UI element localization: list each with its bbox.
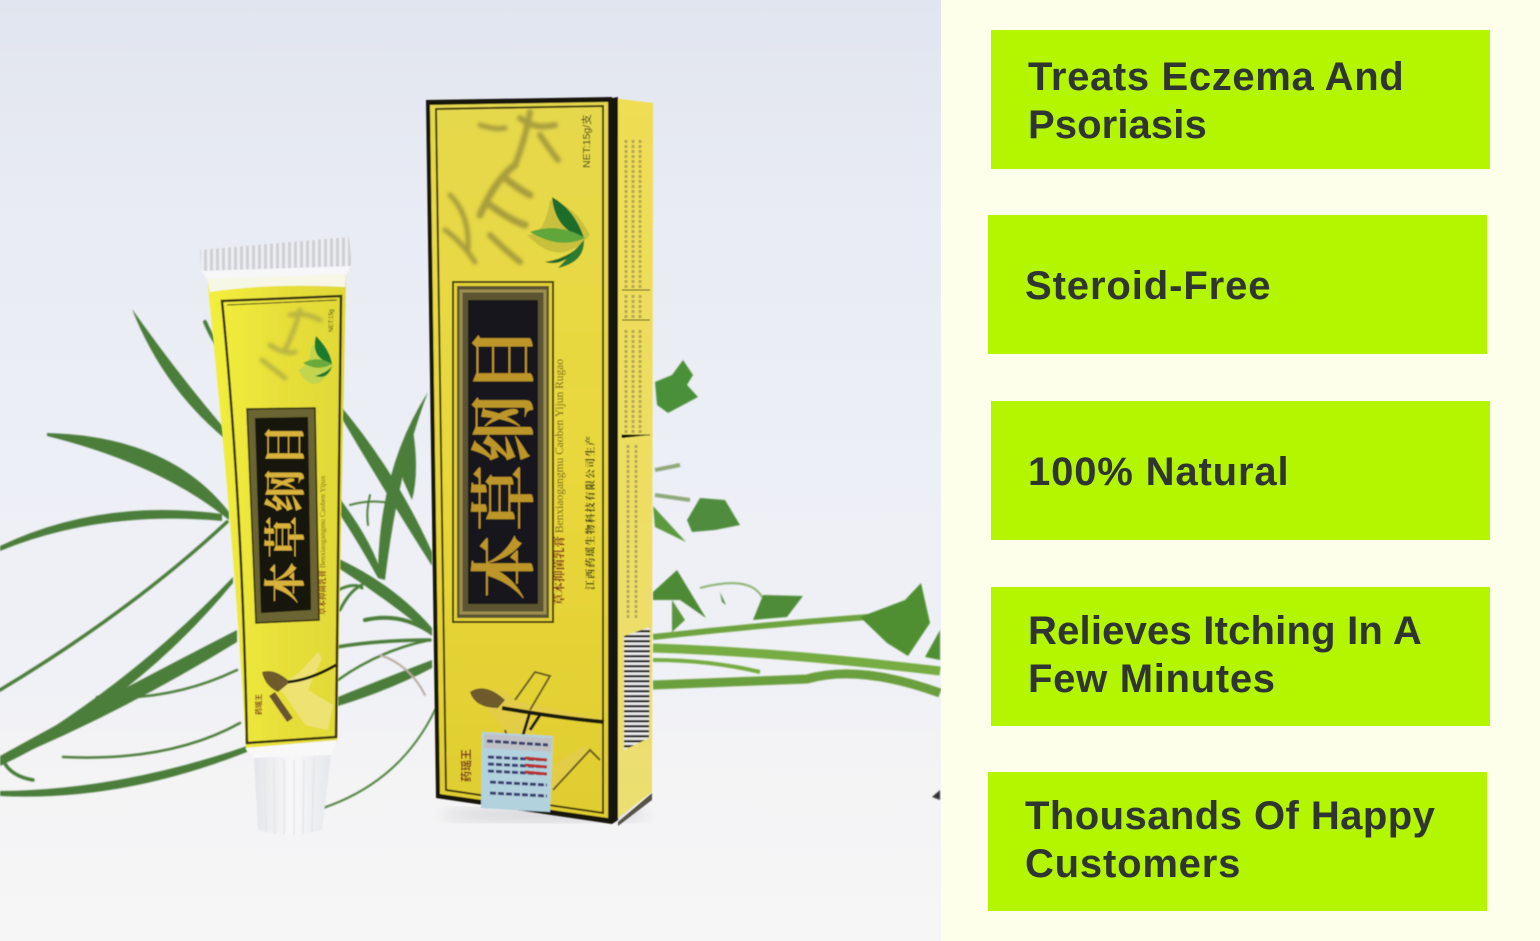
benefit card: relieves itching: Few Minutes bbox=[1028, 657, 1276, 701]
tube figure illustration bbox=[262, 652, 336, 730]
figure illustration bbox=[470, 672, 604, 790]
benefit card: treats eczema and psoriasis bbox=[991, 30, 1490, 169]
tube crimped end bbox=[245, 740, 337, 835]
net weight label: NET:15g/支 bbox=[581, 114, 593, 168]
tube ribbed cap bbox=[200, 237, 352, 292]
product box bbox=[426, 97, 653, 826]
benefit card: relieves itching: Relieves Itching In A bbox=[1028, 609, 1422, 653]
benefit card: treats eczema and psoriasis: Treats Eczema And bbox=[1028, 55, 1404, 99]
benefit card: relieves itching bbox=[991, 587, 1490, 726]
benefit card: steroid-free bbox=[988, 215, 1487, 354]
barcode bbox=[624, 627, 650, 750]
benefit card: 100% natural: 100% Natural bbox=[1028, 450, 1289, 494]
product photo panel bbox=[0, 0, 941, 941]
tube frame lines bbox=[222, 296, 341, 743]
security sticker bbox=[481, 732, 553, 812]
brand name plate: 本草纲目 bbox=[451, 324, 546, 600]
box shadow bbox=[440, 808, 650, 822]
tube seal text: 药瑶王 bbox=[254, 694, 264, 715]
tube body bbox=[207, 272, 346, 750]
box side face bbox=[612, 97, 653, 826]
tube brand plate: 本草纲目 bbox=[253, 420, 313, 604]
tea leaf emblem bbox=[527, 197, 590, 268]
tube weight label: NET:15g bbox=[329, 309, 335, 332]
benefit card: happy customers bbox=[988, 772, 1487, 911]
ointment tube bbox=[200, 237, 352, 835]
benefit card: happy customers: Thousands Of Happy bbox=[1025, 794, 1435, 838]
stamp seal text: 药瑶王 bbox=[458, 749, 474, 782]
product name text: 草本抑菌乳膏 Benxiaogangmu Caoben Yijun Rugao bbox=[552, 359, 566, 605]
manufacturer text: 江西药瑶生物科技有限公司生产 bbox=[582, 435, 597, 590]
left plant leaves bbox=[0, 309, 435, 808]
benefit card: happy customers: Customers bbox=[1025, 842, 1241, 886]
plant sketch on tube bbox=[262, 310, 320, 378]
photo background bbox=[0, 0, 941, 941]
tube small print: 草本抑菌乳膏 Benxiaogangmu Caoben Yijun bbox=[317, 476, 327, 615]
benefit card: treats eczema and psoriasis: Psoriasis bbox=[1028, 103, 1207, 147]
box front face bbox=[426, 97, 612, 824]
benefit card: 100% natural bbox=[991, 401, 1490, 540]
benefit card: steroid-free: Steroid-Free bbox=[1025, 264, 1271, 308]
tube tea leaf emblem bbox=[298, 336, 333, 384]
right plant stems and leaves bbox=[653, 360, 940, 800]
plant sketch on box bbox=[445, 112, 558, 262]
